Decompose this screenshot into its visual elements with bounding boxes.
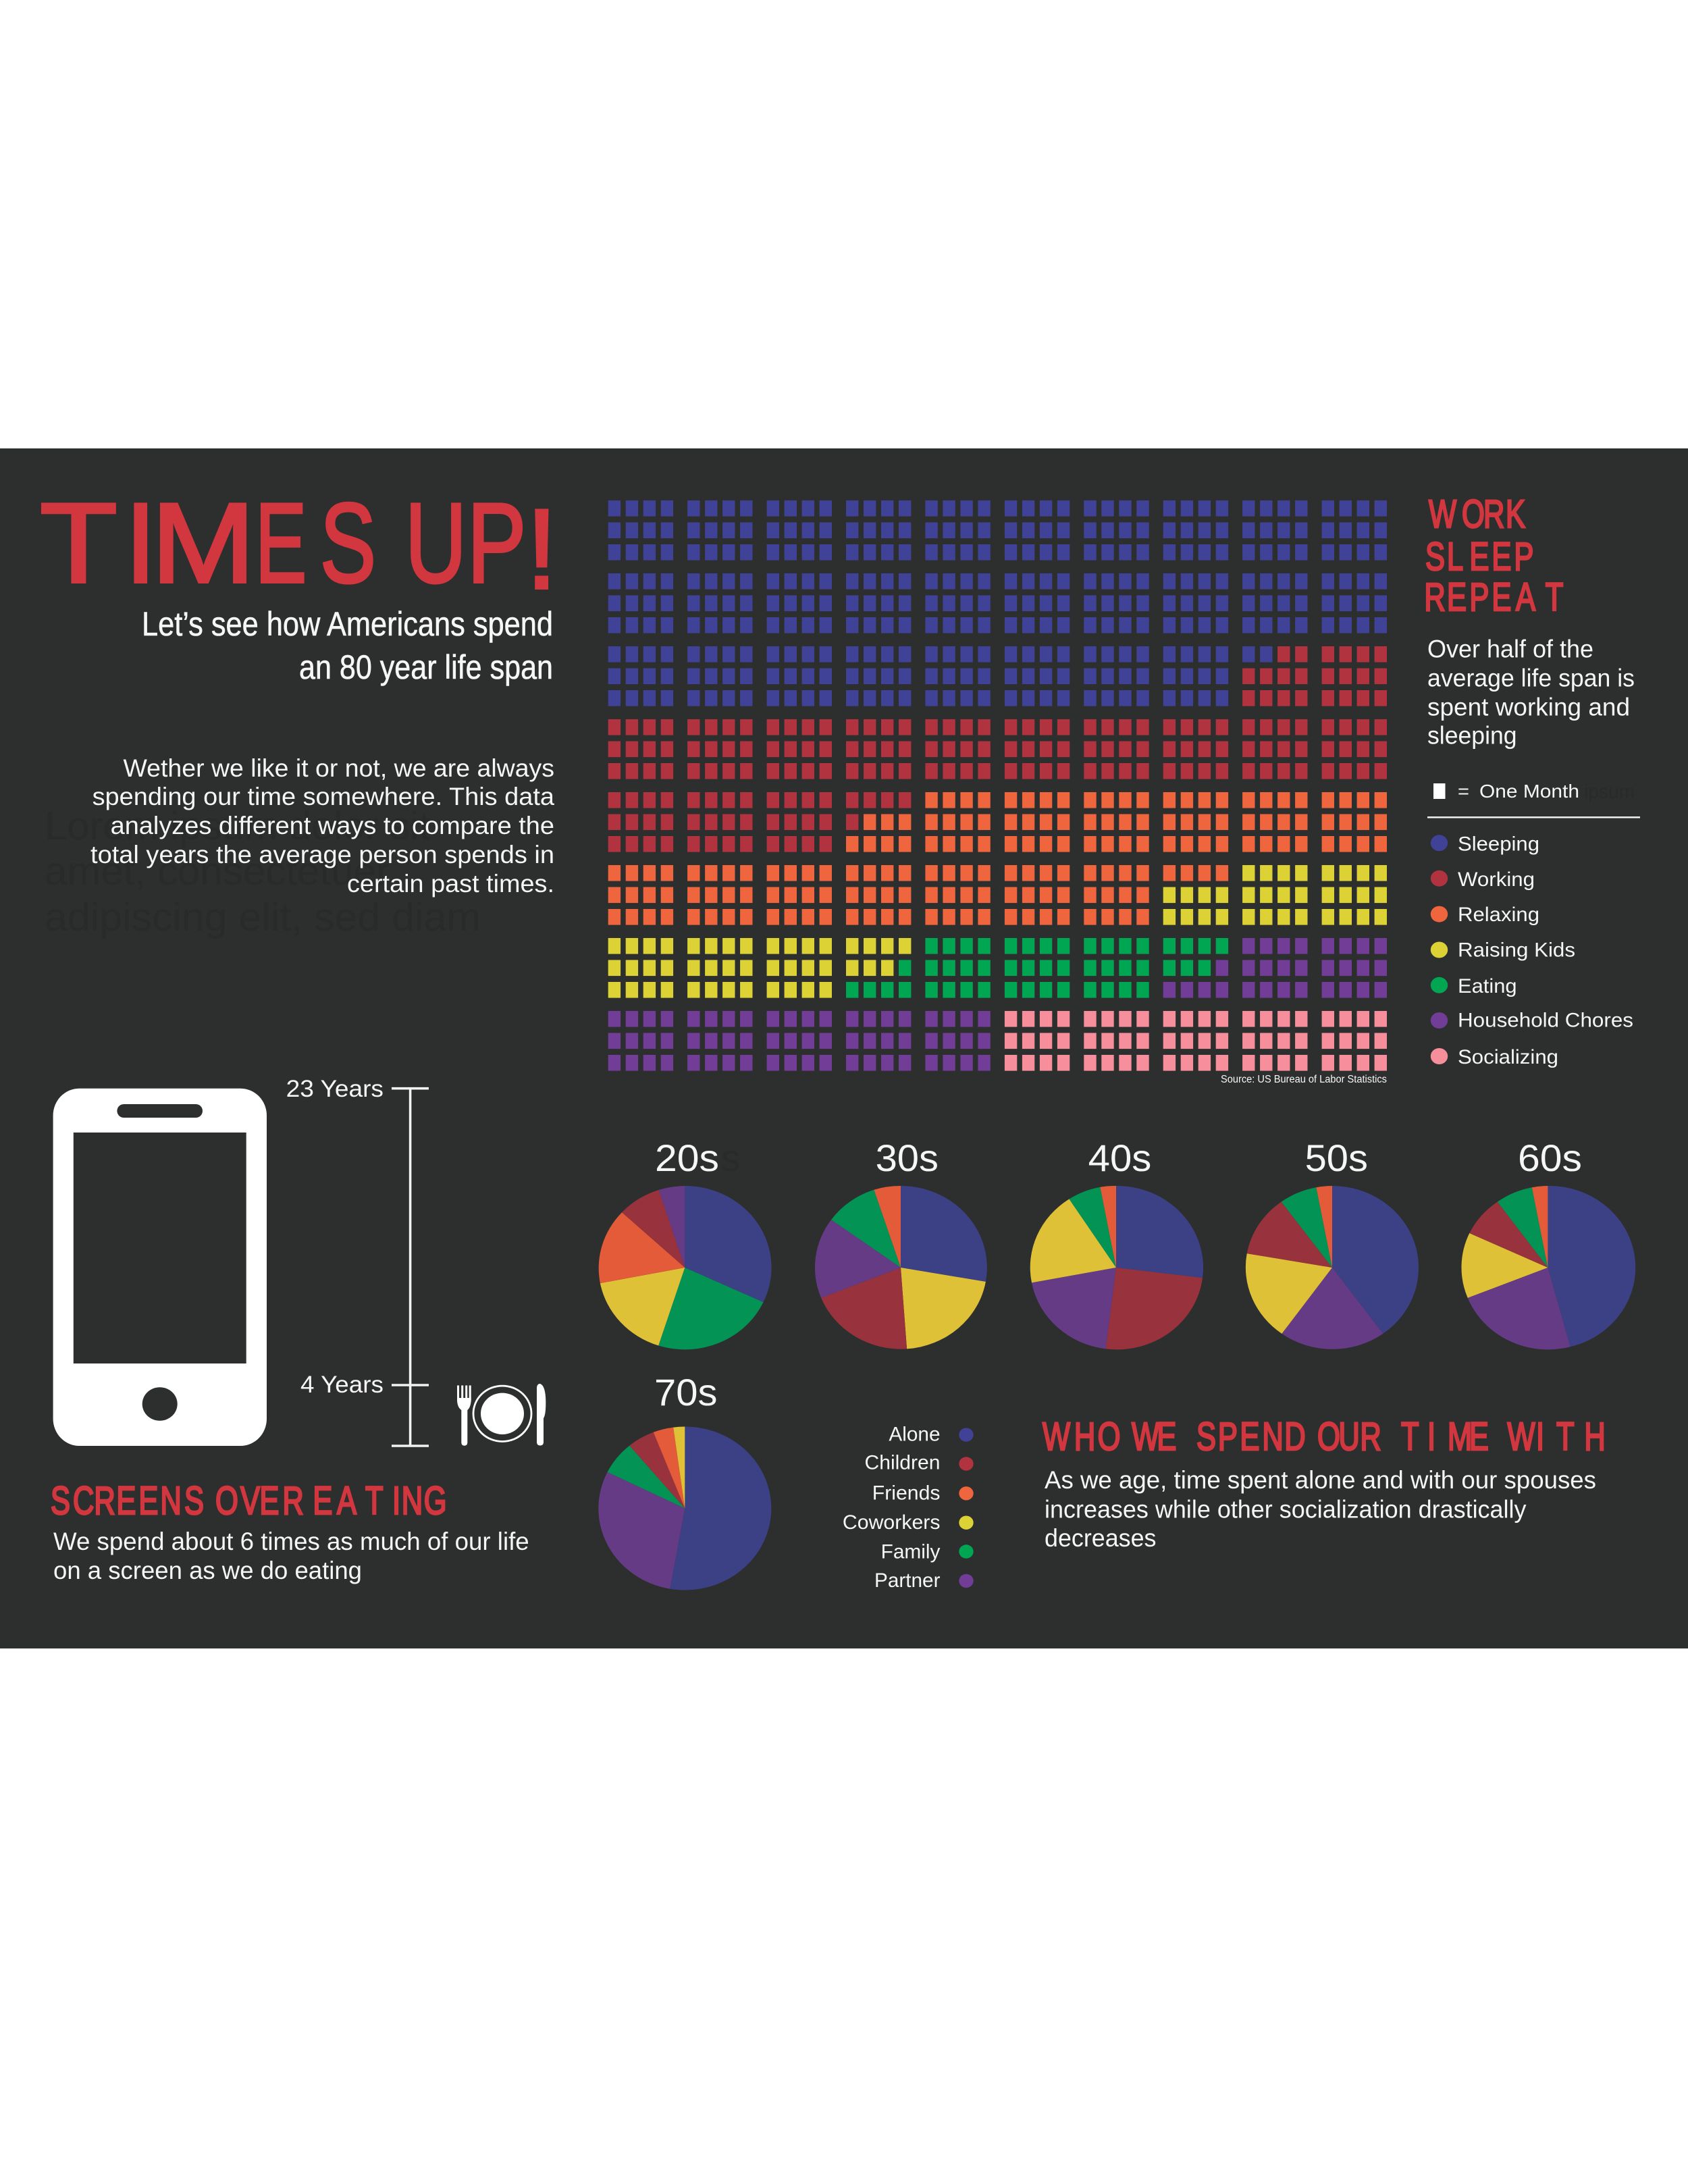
legend: children bbox=[864, 1452, 974, 1474]
pie chart: 30s bbox=[815, 1137, 987, 1349]
title: S bbox=[320, 479, 376, 606]
key: one month: = bbox=[1458, 781, 1469, 802]
intro paragraph: total years the average person spends in bbox=[90, 840, 554, 868]
legend: children: Children bbox=[864, 1452, 940, 1474]
title: P bbox=[467, 479, 527, 606]
title: U bbox=[405, 479, 466, 606]
heading: who we spend our time with: WHO WE SPEND OUR TIME WITH bbox=[1043, 1415, 1606, 1458]
ghost placeholder text bbox=[45, 781, 1635, 1179]
pie chart: 70s bbox=[598, 1371, 771, 1590]
scale bar bbox=[392, 1089, 429, 1446]
legend: family: Family bbox=[881, 1541, 940, 1563]
legend: relaxing: Relaxing bbox=[1458, 904, 1539, 926]
intro paragraph: spending our time somewhere. This data bbox=[93, 782, 554, 810]
legend: working: Working bbox=[1458, 868, 1535, 891]
legend: coworkers: Coworkers bbox=[843, 1511, 940, 1534]
dark background panel bbox=[0, 448, 1688, 1648]
legend: sleeping: Sleeping bbox=[1458, 833, 1539, 856]
heading: work sleep repeat: WORK bbox=[1429, 492, 1525, 536]
title: T bbox=[39, 479, 117, 606]
ghost placeholder text: ipsum bbox=[1584, 781, 1635, 803]
icon: smartphone bbox=[53, 1089, 267, 1446]
waffle: sleeping bbox=[608, 500, 1387, 706]
pie chart: 60s: 60s bbox=[1518, 1137, 1582, 1179]
work and sleep note bbox=[1427, 635, 1635, 750]
intro paragraph bbox=[90, 754, 554, 898]
pie chart: 50s bbox=[1246, 1137, 1419, 1349]
legend: friends bbox=[872, 1482, 974, 1505]
companion legend bbox=[843, 1423, 974, 1592]
legend: alone bbox=[889, 1423, 974, 1445]
companions note: As we age, time spent alone and with our spouses bbox=[1045, 1465, 1596, 1494]
ghost placeholder text: adipiscing elit, sed diam bbox=[45, 895, 481, 939]
activity legend bbox=[1431, 833, 1633, 1068]
title: ! bbox=[526, 486, 558, 613]
pie chart: 70s: 70s bbox=[654, 1371, 717, 1413]
companions note: increases while other socialization drastically bbox=[1045, 1495, 1527, 1524]
work and sleep note: Over half of the bbox=[1427, 635, 1593, 663]
legend: family bbox=[881, 1541, 974, 1563]
intro paragraph: Wether we like it or not, we are always bbox=[123, 754, 554, 782]
key: one month bbox=[1433, 781, 1579, 802]
work and sleep note: sleeping bbox=[1427, 721, 1517, 750]
work and sleep note: average life span is bbox=[1427, 664, 1635, 692]
waffle: socializing bbox=[1005, 1011, 1387, 1071]
legend: socializing: Socializing bbox=[1458, 1046, 1558, 1068]
waffle: household chores bbox=[608, 938, 1387, 1071]
waffle: raising kids bbox=[608, 865, 1387, 998]
waffle: relaxing bbox=[608, 792, 1387, 925]
label: 4 years: 4 Years bbox=[300, 1372, 384, 1398]
title: I bbox=[125, 479, 157, 606]
waffle: working bbox=[608, 646, 1387, 852]
pie chart: 50s: 50s bbox=[1305, 1137, 1368, 1179]
heading: work sleep repeat: REPEAT bbox=[1424, 575, 1563, 619]
waffle: eating bbox=[846, 938, 1228, 998]
title: M bbox=[151, 479, 255, 606]
label: 23 years: 23 Years bbox=[286, 1076, 384, 1102]
intro paragraph: certain past times. bbox=[347, 869, 554, 898]
pie chart: 30s: 30s bbox=[876, 1137, 939, 1179]
pie chart: 40s: 40s bbox=[1088, 1137, 1151, 1179]
legend: raising kids: Raising Kids bbox=[1458, 939, 1575, 962]
key: one month: One Month bbox=[1479, 781, 1579, 802]
pie chart: 20s: 20s bbox=[655, 1137, 719, 1179]
screens note: We spend about 6 times as much of our life bbox=[53, 1527, 529, 1555]
legend: partner bbox=[874, 1569, 974, 1592]
ghost placeholder text: amet, consectetuer bbox=[45, 850, 390, 893]
legend: eating bbox=[1431, 975, 1517, 997]
title bbox=[39, 479, 558, 613]
companions note: decreases bbox=[1045, 1524, 1156, 1552]
source note: Source: US Bureau of Labor Statistics bbox=[1221, 1074, 1387, 1085]
subtitle: Let’s see how Americans spend bbox=[142, 605, 553, 643]
work and sleep note: spent working and bbox=[1427, 693, 1630, 721]
heading: work sleep repeat: SLEEP bbox=[1425, 535, 1533, 578]
legend: household chores: Household Chores bbox=[1458, 1010, 1633, 1032]
title: E bbox=[255, 479, 307, 606]
heading: screens over eating: SCREENS OVER EATING bbox=[51, 1479, 447, 1522]
waffle chart: 960 months of an 80 year life bbox=[608, 500, 1387, 1071]
screens note bbox=[53, 1527, 529, 1584]
legend: alone: Alone bbox=[889, 1423, 940, 1445]
intro paragraph: analyzes different ways to compare the bbox=[111, 811, 554, 839]
ghost placeholder text: s bbox=[721, 1137, 740, 1179]
pie chart: 60s bbox=[1461, 1137, 1635, 1349]
legend: friends: Friends bbox=[872, 1482, 940, 1505]
legend: eating: Eating bbox=[1458, 975, 1517, 997]
companions note bbox=[1045, 1465, 1596, 1552]
legend: partner: Partner bbox=[874, 1569, 940, 1592]
pie chart: 40s bbox=[1030, 1137, 1203, 1349]
heading: work sleep repeat bbox=[1424, 492, 1563, 619]
icon: plate with fork and knife bbox=[457, 1384, 546, 1446]
pie chart: 20s bbox=[599, 1137, 772, 1349]
subtitle bbox=[142, 605, 553, 686]
ghost placeholder text: Lorem ipsum dolor sit bbox=[45, 804, 430, 848]
screens note: on a screen as we do eating bbox=[53, 1556, 362, 1584]
subtitle: an 80 year life span bbox=[299, 648, 553, 686]
